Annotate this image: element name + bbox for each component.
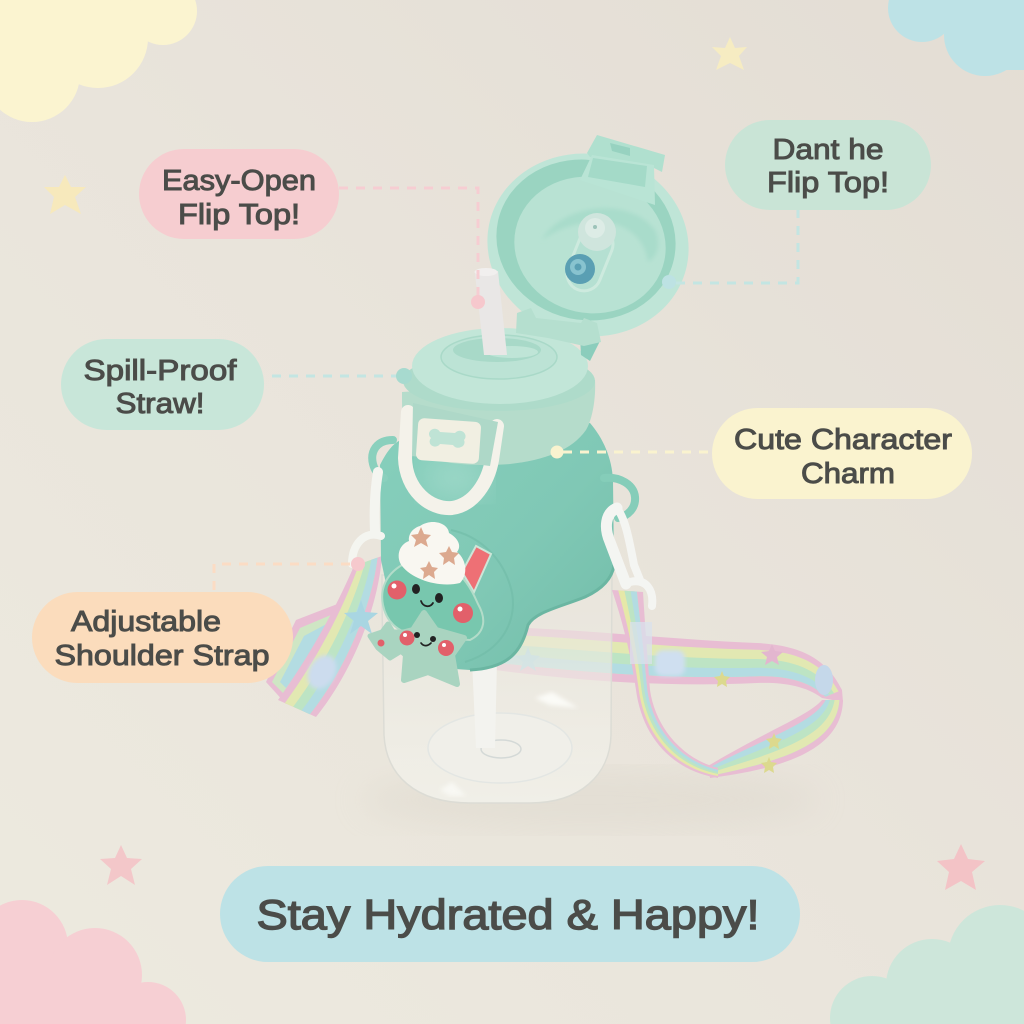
- strap: right drop band: [612, 590, 718, 778]
- callout: spill-proof straw: Spill-Proof: [84, 355, 238, 387]
- callout: dant he flip top: Dant he: [772, 134, 884, 166]
- glass bottle body: [382, 575, 612, 803]
- teal side loop right: [604, 478, 635, 518]
- charm: cream star toppers: [411, 527, 459, 579]
- hinge: [516, 308, 601, 361]
- flip lid: [470, 135, 706, 355]
- connector: easy-open flip top: [339, 188, 485, 309]
- cloud: bottom left pink: [0, 900, 186, 1024]
- charm: small star: [370, 624, 406, 658]
- connector: spill-proof straw: [272, 368, 412, 384]
- callout: cute character charm: [712, 408, 972, 499]
- lid top disc: [403, 328, 595, 411]
- lid collar: [402, 380, 595, 465]
- callout: spill-proof straw: [61, 339, 264, 430]
- star: top left yellow: [44, 175, 86, 214]
- strap: left band front: [278, 556, 382, 717]
- white clip left: [352, 472, 381, 564]
- lid inner crescent: [542, 208, 658, 262]
- charm: star face: [378, 630, 454, 656]
- strap: back band upper: [495, 627, 843, 702]
- connector: cute character charm: [550, 446, 712, 458]
- callout: adjustable shoulder strap: Adjustable: [71, 606, 221, 638]
- callout: cute character charm: Cute Character: [734, 424, 952, 456]
- callout: easy-open flip top: Easy-Open: [162, 165, 316, 197]
- callout: dant he flip top: [725, 120, 931, 210]
- charm: cheeks and face: [388, 580, 473, 623]
- character charm: [370, 522, 491, 684]
- banner: stay hydrated and happy: [220, 866, 800, 962]
- star: top right yellow: [712, 37, 747, 70]
- connector: adjustable shoulder strap: [214, 557, 365, 590]
- buckle plate: [412, 403, 498, 466]
- charm: ear: [462, 546, 491, 592]
- cloud: bottom right green: [830, 905, 1024, 1024]
- straw top: [474, 268, 507, 355]
- charm: body: [382, 565, 483, 640]
- strap: back band star prints: [516, 644, 833, 773]
- connector: dant he flip top: [662, 209, 798, 289]
- cloud: top left yellow: [0, 0, 197, 122]
- charm: whipped cream: [399, 522, 465, 584]
- callout: spill-proof straw: Straw!: [116, 388, 204, 420]
- star: bottom right pink: [937, 844, 985, 890]
- cloud: top right blue: [888, 0, 1024, 76]
- banner: stay hydrated and happy: Stay Hydrated & Happy!: [256, 891, 760, 938]
- nozzle: [562, 213, 618, 296]
- star: bottom left pink: [100, 845, 142, 885]
- callout: cute character charm: Charm: [801, 458, 895, 490]
- callout: dant he flip top: Flip Top!: [767, 167, 889, 199]
- callout: adjustable shoulder strap: [32, 592, 293, 683]
- white carry handle: [405, 412, 497, 508]
- bone icon: [429, 429, 466, 448]
- strap: back band lower: [708, 700, 843, 778]
- callout: easy-open flip top: Flip Top!: [178, 199, 300, 231]
- bottle shadow: [360, 770, 820, 830]
- sleeve: teal silicone body: [380, 423, 614, 670]
- callout: easy-open flip top: [139, 149, 339, 239]
- teal side loop left: [372, 440, 393, 478]
- strap: left band back: [266, 603, 340, 704]
- charm: big star: [386, 613, 464, 684]
- white carabiner right: [606, 508, 652, 606]
- callout: adjustable shoulder strap: Shoulder Strap: [54, 640, 270, 672]
- lid latch tab: [580, 135, 665, 205]
